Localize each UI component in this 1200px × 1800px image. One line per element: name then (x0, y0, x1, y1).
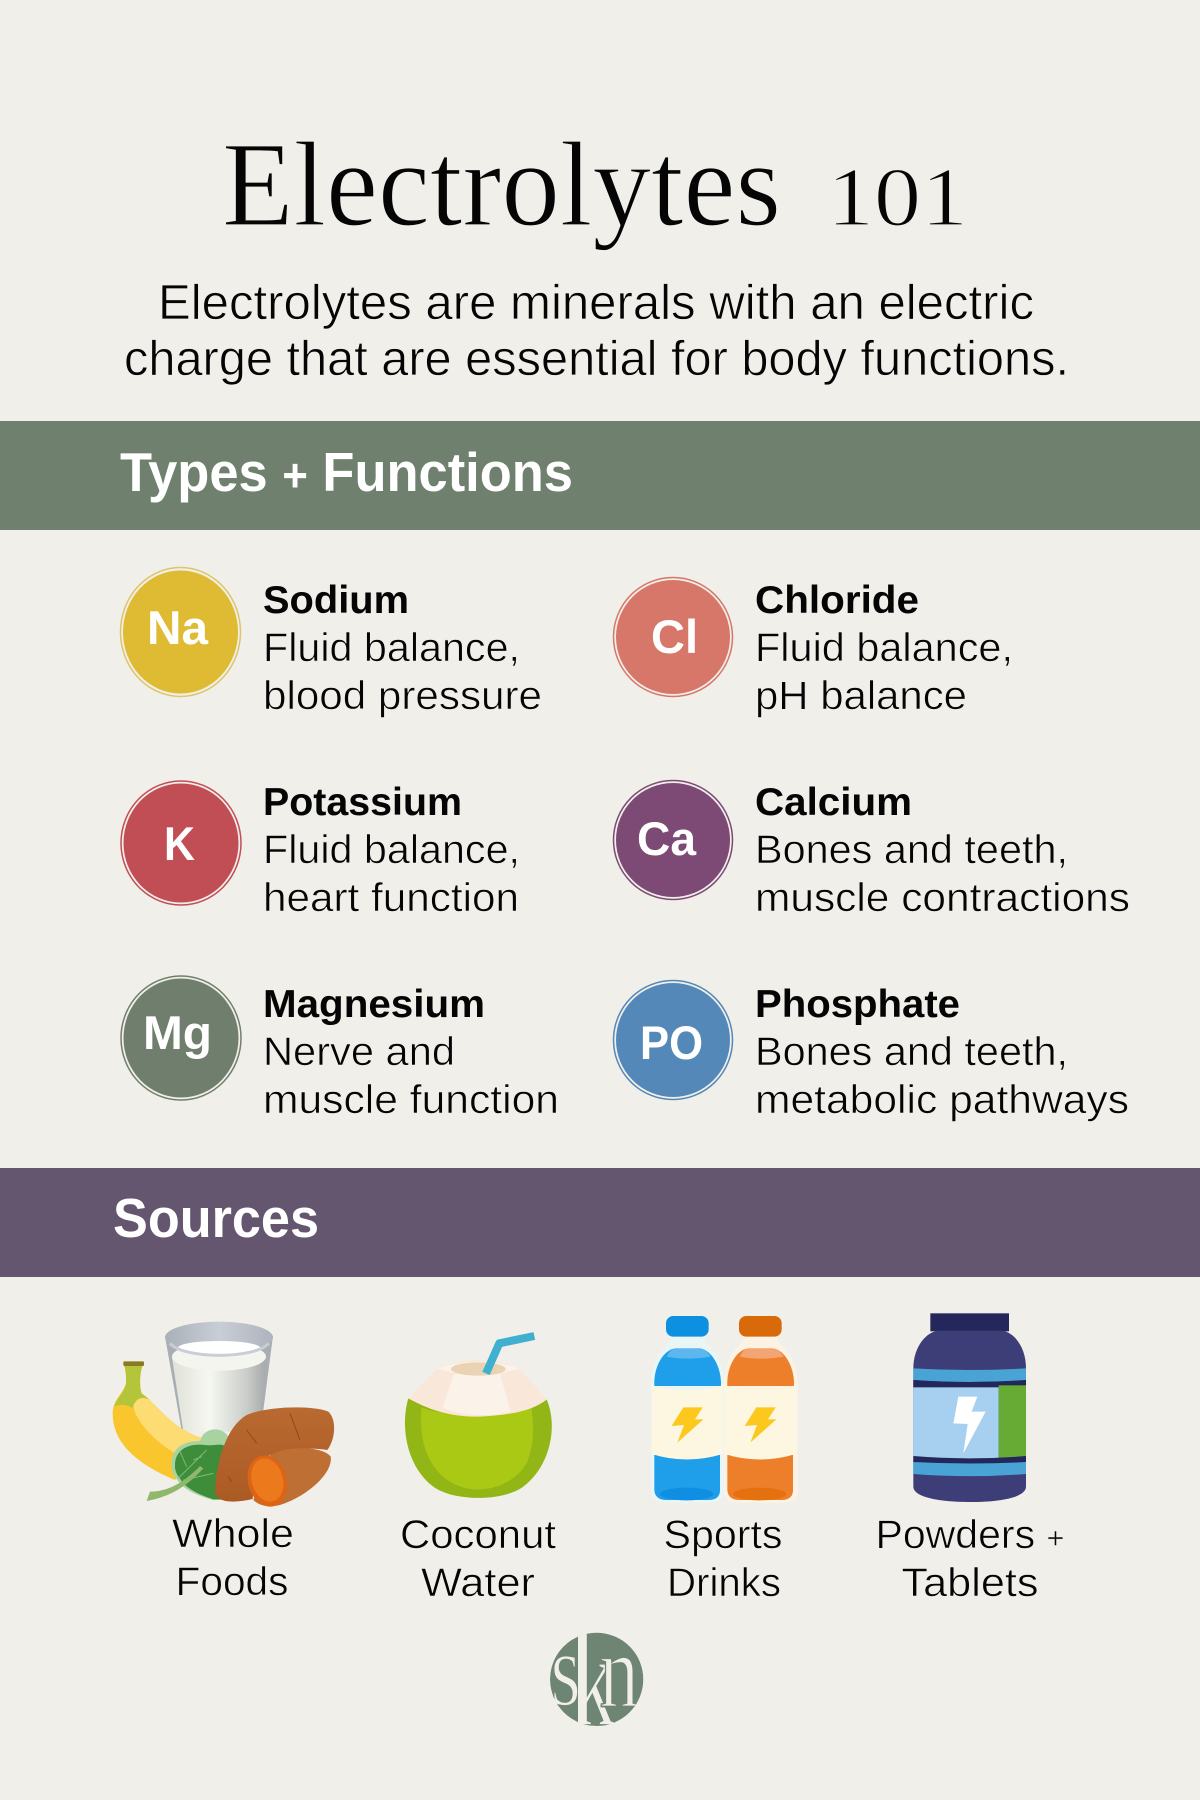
panel: sodium: blood pressure (263, 674, 542, 718)
icon: K badge (121, 781, 241, 905)
section header: types + functions (0, 421, 1200, 530)
section header: sources: Sources (113, 1187, 319, 1249)
panel: sodium: Sodium (263, 579, 409, 622)
icon: sports drinks (651, 1316, 798, 1503)
label: coconut water: Coconut (400, 1513, 556, 1557)
icon: coconut (405, 1336, 552, 1498)
panel: chloride: pH balance (755, 674, 967, 718)
icon: Mg badge: Mg (143, 1006, 212, 1059)
label: sports drinks (664, 1513, 782, 1605)
icon: Ca badge: Ca (637, 812, 697, 865)
subtitle text: Electrolytes are minerals with an electric (158, 276, 1034, 330)
panel: magnesium: Magnesium (263, 983, 485, 1026)
label: sports drinks: Sports (664, 1513, 782, 1557)
icon: PO badge: PO (640, 1016, 703, 1069)
section header: types + functions: Types + Functions (120, 441, 573, 503)
title: 101 (827, 151, 968, 244)
panel: chloride: Fluid balance, (755, 626, 1013, 670)
icon: Ca badge (614, 780, 732, 900)
panel: chloride: Chloride (755, 579, 919, 622)
panel: phosphate: Phosphate (755, 983, 960, 1026)
icon: Cl badge (614, 578, 732, 696)
panel: chloride (614, 578, 1013, 718)
panel: sodium: Fluid balance, (263, 626, 520, 670)
sweet potatoes (215, 1407, 334, 1511)
logo: s (551, 1611, 581, 1728)
icon: powder jar (913, 1313, 1026, 1502)
label: powders + tablets: Tablets (902, 1561, 1038, 1605)
panel: potassium: Fluid balance, (263, 828, 520, 872)
panel: phosphate: Bones and teeth, (755, 1030, 1068, 1074)
label: sports drinks: Drinks (667, 1561, 781, 1605)
label: whole foods: Foods (176, 1560, 288, 1604)
logo: n (599, 1613, 639, 1730)
panel: potassium: Potassium (263, 781, 462, 824)
logo: k (573, 1606, 615, 1754)
panel: calcium (614, 780, 1130, 920)
subtitle text: charge that are essential for body functions. (124, 332, 1069, 386)
label: coconut water: Water (421, 1561, 535, 1605)
label: whole foods (172, 1512, 294, 1604)
icon: Na badge: Na (147, 601, 209, 654)
orange bottle (724, 1316, 798, 1503)
spinach (147, 1429, 230, 1501)
label: powders + tablets: Powders + (876, 1513, 1064, 1557)
glass of milk (165, 1322, 273, 1432)
panel: magnesium: Nerve and (263, 1030, 455, 1074)
panel: calcium: Bones and teeth, (755, 828, 1068, 872)
icon: K badge: K (164, 817, 195, 870)
title: Electrolytes (222, 118, 781, 252)
blue bottle (651, 1316, 725, 1503)
icon: Mg badge (121, 976, 241, 1100)
icon: Na badge (120, 568, 240, 696)
section header: sources (0, 1168, 1200, 1277)
panel: calcium: Calcium (755, 781, 912, 824)
panel: potassium (121, 781, 520, 920)
logo (550, 1632, 644, 1726)
label: whole foods: Whole (172, 1512, 294, 1556)
panel: potassium: heart function (263, 876, 519, 920)
banana (113, 1361, 203, 1480)
panel: calcium: muscle contractions (755, 876, 1130, 920)
icon: PO badge (614, 980, 732, 1100)
icon: Cl badge: Cl (651, 610, 698, 663)
icon: whole foods (113, 1322, 334, 1511)
panel: magnesium (121, 976, 559, 1122)
subtitle text (124, 276, 1069, 386)
panel: sodium (120, 568, 542, 718)
panel: phosphate (614, 980, 1129, 1122)
label: powders + tablets (876, 1513, 1064, 1605)
label: coconut water (400, 1513, 556, 1605)
panel: phosphate: metabolic pathways (755, 1078, 1129, 1122)
panel: magnesium: muscle function (263, 1078, 559, 1122)
